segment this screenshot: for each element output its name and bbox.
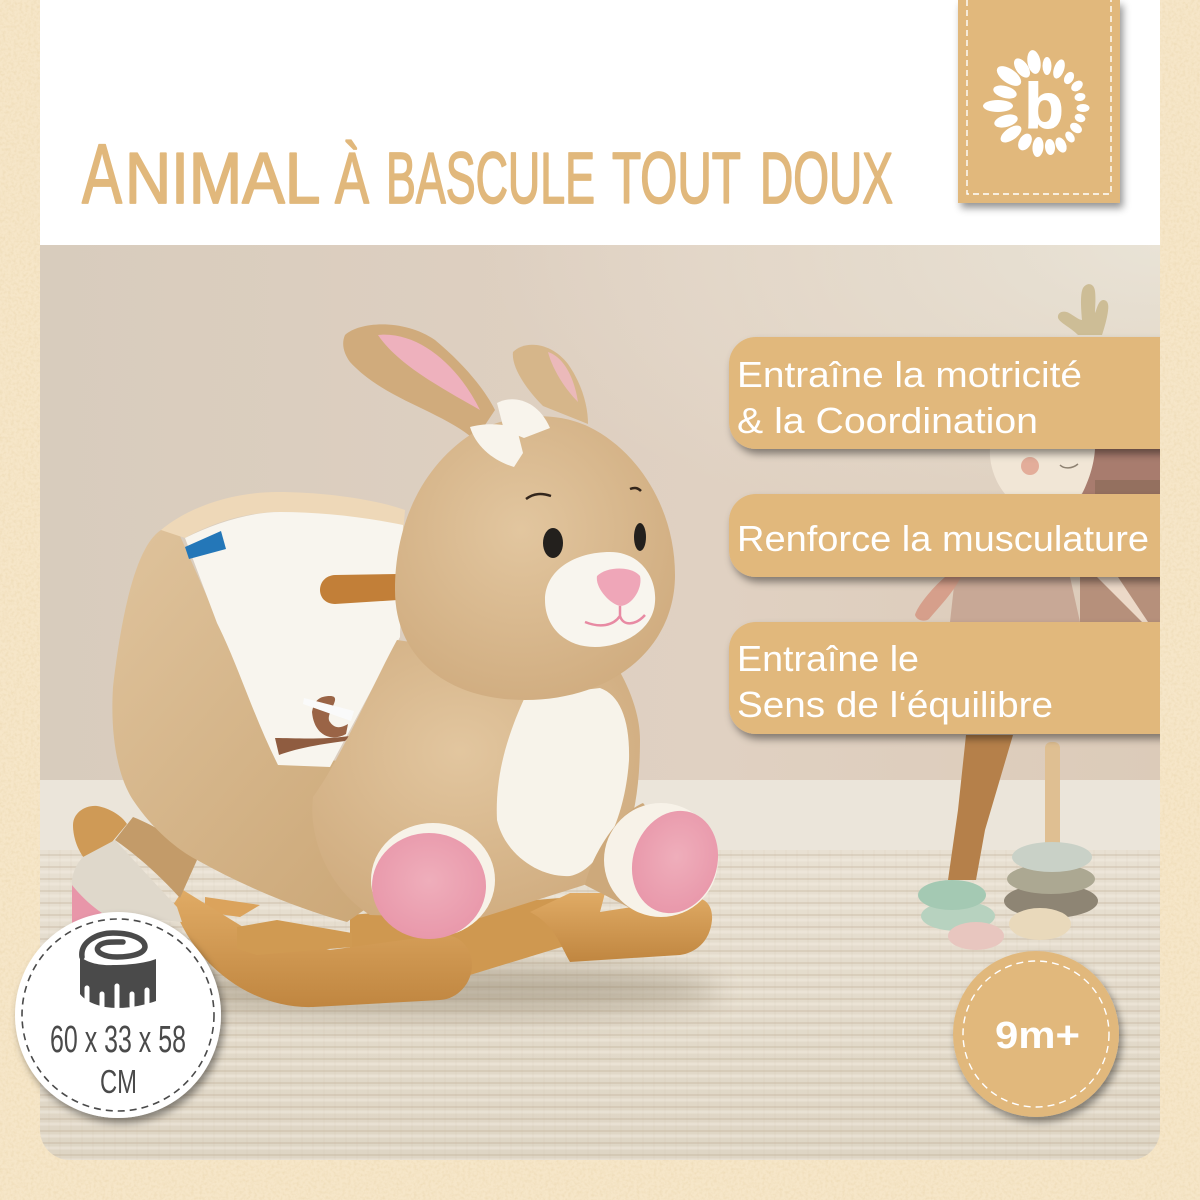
- icon: tape measure: [80, 933, 156, 1009]
- benefit badge: muscles: [729, 494, 1165, 577]
- benefit badge: motricity: [729, 337, 1165, 449]
- header panel: [40, 0, 1160, 246]
- ring stacker: [1045, 742, 1060, 852]
- benefit text: coordination: & la Coordination: [737, 400, 1038, 441]
- skirting board: [40, 780, 1160, 852]
- sleeping plush head: [990, 449, 1095, 494]
- dimensions: 60 x 33 x 58: [50, 1019, 186, 1061]
- belt: [275, 696, 354, 755]
- plush clothes: [1082, 449, 1160, 494]
- title: À: [335, 139, 369, 219]
- stool leg: [948, 735, 1013, 880]
- unit: CM: [100, 1063, 137, 1100]
- wall: [40, 245, 1160, 785]
- seat cushion: [185, 512, 403, 767]
- handle: [320, 574, 398, 604]
- chair rim: [161, 492, 405, 538]
- plush body: [950, 577, 1080, 622]
- wooden rocker left: [173, 890, 472, 1007]
- age badge: [953, 951, 1119, 1117]
- icon: flower logo: b: [1024, 70, 1064, 142]
- right foot: [604, 803, 718, 917]
- rug: [40, 850, 1160, 1160]
- benefit text: muscles: Renforce la musculature: [737, 518, 1149, 559]
- seat label: [185, 531, 226, 559]
- rear tail rocker: [73, 806, 127, 858]
- floor shadow: [140, 966, 720, 1014]
- age badge: 9m+: [995, 1015, 1080, 1057]
- eyes and brows: [526, 488, 646, 558]
- benefit text: balance line two: Sens de l‘équilibre: [737, 684, 1053, 725]
- back slat: [205, 897, 260, 917]
- head: [395, 416, 675, 700]
- chair side: [112, 530, 364, 922]
- left foot: [371, 823, 495, 939]
- belly: [497, 688, 629, 876]
- torso: [312, 640, 640, 918]
- wooden rocker right: [530, 893, 712, 962]
- title: A: [82, 127, 122, 221]
- title: TOUT: [612, 139, 740, 219]
- ear left: [343, 324, 495, 440]
- seat plank: [242, 920, 350, 950]
- rear foot: [72, 817, 197, 923]
- benefit text: balance line one: Entraîne le: [737, 638, 919, 679]
- icon: flower logo: [983, 49, 1090, 157]
- antler: [1058, 284, 1108, 335]
- centre plank: [350, 898, 568, 975]
- bow: [470, 399, 550, 467]
- muzzle: [545, 552, 655, 647]
- product photo: [40, 245, 1165, 1160]
- right leg: [585, 803, 645, 908]
- benefit badge: balance: [729, 622, 1165, 734]
- benefit text: motricity: Entraîne la motricité: [737, 354, 1082, 395]
- title: BASCULE: [386, 139, 595, 219]
- title: NIMAL: [125, 139, 319, 219]
- ear right: [513, 345, 588, 424]
- title: DOUX: [760, 139, 893, 219]
- rocking rabbit: [72, 324, 731, 1014]
- background toys: [915, 284, 1160, 950]
- size badge: [15, 912, 221, 1118]
- brand label tag: [958, 0, 1120, 203]
